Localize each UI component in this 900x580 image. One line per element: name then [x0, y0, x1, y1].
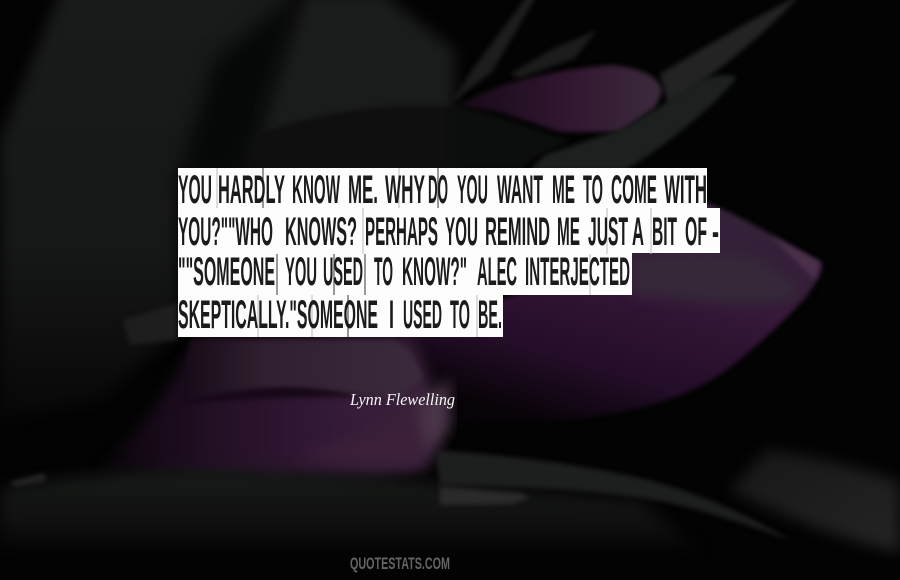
- right tulip: [400, 200, 822, 425]
- line 4: I: [389, 293, 394, 337]
- quote label strips: [178, 168, 720, 337]
- line 3: USED: [323, 250, 363, 294]
- line 1: HARDLY: [218, 168, 285, 212]
- upper right tulip and leaves: [450, 0, 800, 170]
- author name: Lynn Flewelling: [349, 390, 455, 409]
- quote text: [178, 168, 719, 337]
- line 1: KNOW: [292, 168, 340, 212]
- line 2: [178, 210, 719, 254]
- lower leaves: [0, 450, 900, 552]
- line 1: YOU: [457, 168, 488, 212]
- line 4: SKEPTICALLY."SOMEONE: [178, 293, 378, 337]
- line 3: KNOW?": [402, 250, 467, 294]
- footer site name: QUOTESTATS.COM: [350, 554, 450, 573]
- line 3: ALEC: [477, 250, 517, 294]
- quote text: WITH: [664, 168, 707, 212]
- lower left bud: [100, 337, 450, 478]
- line 2: PERHAPS: [365, 210, 438, 254]
- line 2: -: [712, 210, 719, 254]
- quote text: BE.: [478, 293, 502, 337]
- line 3: ""SOMEONE: [178, 250, 275, 294]
- line 1: ME.: [348, 168, 378, 212]
- line 3: YOU: [285, 250, 317, 294]
- line 1: ME: [552, 168, 575, 212]
- torn paper seams: [217, 168, 651, 337]
- line 4: USED: [403, 293, 442, 337]
- line 1: WHY: [385, 168, 425, 212]
- line 2: ME: [557, 210, 580, 254]
- line 1: [178, 168, 707, 212]
- line 2: YOU: [445, 210, 478, 254]
- upper left leaves: [0, 0, 455, 420]
- line 2: A: [632, 210, 644, 254]
- line 4: [178, 293, 502, 337]
- quote text: INTERJECTED: [525, 250, 630, 294]
- line 2: OF: [685, 210, 707, 254]
- line 4: TO: [450, 293, 470, 337]
- line 1: DO: [428, 168, 448, 212]
- line 1: TO: [583, 168, 603, 212]
- line 1: YOU: [178, 168, 212, 212]
- line 3: [178, 250, 630, 294]
- line 2: BIT: [652, 210, 677, 254]
- line 2: JUST: [588, 210, 628, 254]
- line 2: KNOWS?: [285, 210, 357, 254]
- line 1: COME: [611, 168, 657, 212]
- line 2: YOU?""WHO: [178, 210, 273, 254]
- line 3: TO: [374, 250, 393, 294]
- line 2: REMIND: [485, 210, 550, 254]
- line 1: WANT: [497, 168, 543, 212]
